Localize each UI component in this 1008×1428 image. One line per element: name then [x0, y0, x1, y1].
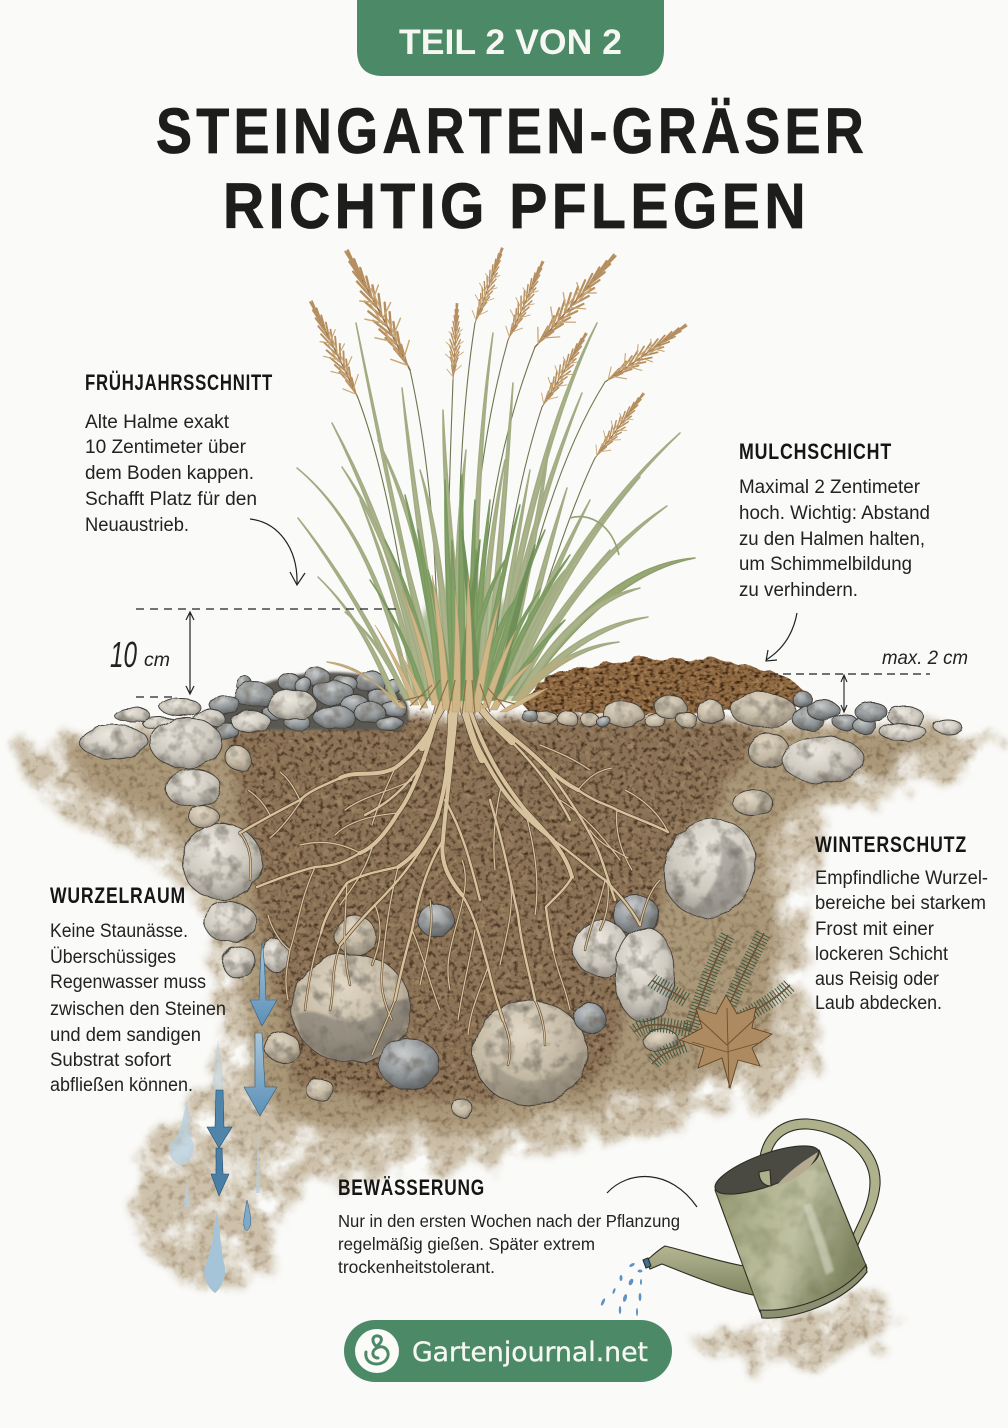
text block: Bewässerung: trockenheitstolerant. — [338, 1257, 495, 1277]
curved arrow: Mulchschicht — [766, 613, 797, 661]
text block: Wurzelraum — [50, 883, 226, 1096]
inner handle — [759, 1170, 771, 1186]
text block: Mulchschicht: zu den Halmen halten, — [739, 529, 925, 550]
text block: Frühjahrsschnitt: Neuaustrieb. — [85, 515, 189, 536]
water drop — [244, 1200, 251, 1230]
measurement: max. 2 cm: max. 2 cm — [882, 648, 968, 669]
gravel and stones — [80, 668, 962, 1117]
fallen leaf — [680, 995, 772, 1088]
text block: Bewässerung: Nur in den ersten Wochen nach der Pflanzung — [338, 1211, 680, 1231]
icon: brand logo — [355, 1329, 399, 1373]
can body — [715, 1150, 867, 1313]
text block: Frühjahrsschnitt: dem Boden kappen. — [85, 463, 254, 484]
text block: Winterschutz: WINTERSCHUTZ — [815, 832, 967, 857]
brand pill: Gartenjournal.net: Gartenjournal.net — [412, 1337, 648, 1368]
measurement: 10 cm: 10 — [110, 634, 137, 675]
text block: Frühjahrsschnitt: FRÜHJAHRSSCHNITT — [85, 370, 273, 395]
text block: Winterschutz: Laub abdecken. — [815, 993, 942, 1014]
badge: Teil 2 von 2 — [357, 0, 664, 76]
dark gravel bed — [212, 672, 409, 730]
measurement: 10 cm: cm — [144, 650, 170, 671]
text block: Mulchschicht — [739, 439, 930, 601]
leaf veins — [692, 1008, 762, 1088]
curved arrow: Bewässerung — [607, 1177, 697, 1207]
text block: Wurzelraum: und dem sandigen — [50, 1025, 201, 1046]
text block: Winterschutz: aus Reisig oder — [815, 969, 940, 990]
arrow 1 — [250, 942, 277, 1026]
text block: Winterschutz: bereiche bei starkem — [815, 893, 986, 914]
text block: Wurzelraum: Keine Staunässe. — [50, 921, 188, 942]
flower stems — [358, 323, 605, 690]
text block: Winterschutz — [815, 832, 988, 1014]
smudge under watering can — [690, 1300, 892, 1366]
badge: Teil 2 von 2: TEIL 2 VON 2 — [399, 23, 622, 62]
arrow 3 — [207, 1090, 232, 1148]
crown of dry stems — [398, 680, 515, 714]
title: STEINGARTEN-GRÄSER — [156, 95, 868, 167]
inner wall — [776, 1152, 818, 1186]
text block: Wurzelraum: Substrat sofort — [50, 1050, 172, 1071]
faded drainage streaks — [169, 1040, 260, 1207]
text block: Wurzelraum: abfließen können. — [50, 1075, 193, 1096]
text block: Bewässerung — [338, 1175, 680, 1277]
text block: Mulchschicht: hoch. Wichtig: Abstand — [739, 503, 930, 524]
branches — [240, 742, 668, 1020]
curved arrow: Frühjahrsschnitt — [250, 519, 305, 585]
soil cross-section — [12, 718, 1005, 1293]
text block: Mulchschicht: Maximal 2 Zentimeter — [739, 477, 921, 498]
text block: Frühjahrsschnitt: 10 Zentimeter über — [85, 437, 247, 458]
mid soil — [60, 725, 950, 1130]
large centre stones — [291, 954, 411, 1062]
right surface gravel — [535, 693, 795, 727]
text block: Winterschutz: lockeren Schicht — [815, 944, 949, 965]
leaf blades dense green layer — [370, 475, 570, 700]
text block: Mulchschicht: zu verhindern. — [739, 580, 858, 601]
text block: Wurzelraum: Regenwasser muss — [50, 972, 206, 993]
nozzle — [643, 1258, 651, 1268]
arrow 2 — [244, 1033, 277, 1116]
flower panicles — [300, 244, 693, 464]
text block: Wurzelraum: zwischen den Steinen — [50, 999, 226, 1020]
measurement: 10 cm — [110, 609, 400, 697]
text block: Mulchschicht: um Schimmelbildung — [739, 554, 912, 575]
soft green mass behind blades — [408, 575, 525, 700]
text block: Mulchschicht: MULCHSCHICHT — [739, 439, 892, 464]
root system — [240, 700, 668, 1065]
text block: Frühjahrsschnitt — [85, 370, 273, 536]
dry tan blades — [352, 575, 548, 712]
main roots — [340, 705, 578, 895]
water spray — [600, 1262, 642, 1316]
drooping blade — [570, 517, 619, 555]
arrow 4 — [211, 1148, 229, 1196]
text block: Winterschutz: Empfindliche Wurzel- — [815, 868, 988, 889]
right buried stones — [747, 733, 789, 767]
spout — [646, 1246, 758, 1296]
watering can — [643, 1119, 880, 1318]
measurement: max. 2 cm — [770, 648, 968, 712]
text block: Bewässerung: regelmäßig gießen. Später extrem — [338, 1234, 595, 1254]
can opening — [710, 1136, 824, 1204]
text block: Frühjahrsschnitt: Alte Halme exakt — [85, 412, 230, 433]
winter protection: fir branches and leaf — [634, 933, 790, 1088]
text block: Wurzelraum: Überschüssiges — [50, 947, 176, 968]
grass clump — [297, 244, 695, 714]
fine rootlets — [240, 745, 668, 1065]
text block: Winterschutz: Frost mit einer — [815, 919, 935, 940]
highlight — [803, 1203, 834, 1275]
lower water run — [204, 1210, 225, 1293]
brand pill: Gartenjournal.net — [344, 1320, 672, 1382]
bottom rim — [760, 1265, 867, 1318]
fir branches — [634, 933, 790, 1064]
leaf blades back layer — [297, 323, 695, 705]
text block: Frühjahrsschnitt: Schafft Platz für den — [85, 489, 257, 510]
dark core soil — [225, 718, 762, 1099]
title: RICHTIG PFLEGEN — [223, 170, 810, 242]
water flow arrows — [169, 942, 277, 1293]
handle — [759, 1119, 880, 1250]
left buried stones — [80, 718, 262, 978]
title — [156, 95, 868, 242]
pale watercolor wash — [12, 723, 1005, 1293]
mulch layer — [522, 657, 808, 714]
left surface gravel — [210, 668, 407, 740]
text block: Wurzelraum: WURZELRAUM — [50, 883, 186, 908]
stone shading on large stones — [296, 835, 747, 1104]
text block: Bewässerung: BEWÄSSERUNG — [338, 1175, 485, 1200]
hub of thick roots — [422, 700, 512, 765]
